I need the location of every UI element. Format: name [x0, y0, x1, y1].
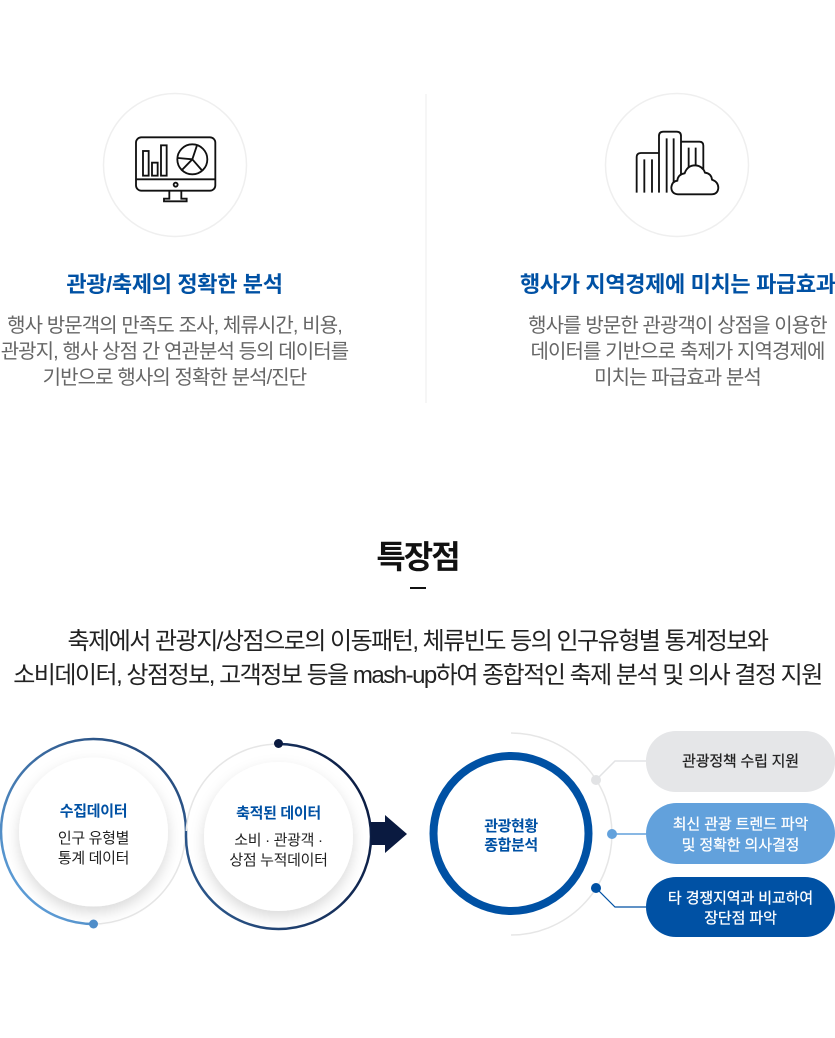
- pill: trend: 및 정확한 의사결정: [682, 837, 799, 854]
- pill: comparison: 장단점 파악: [704, 910, 777, 927]
- label: collected data: 인구 유형별: [58, 830, 129, 847]
- label: accumulated data: 상점 누적데이터: [229, 852, 328, 869]
- pill: comparison: 타 경쟁지역과 비교하여: [668, 890, 813, 907]
- pill: policy support: [646, 732, 835, 792]
- text block: regional economy: 행사를 방문한 관광객이 상점을 이용한: [528, 315, 827, 337]
- label: overall analysis: [484, 818, 538, 854]
- text block: tourism accuracy: [1, 315, 348, 389]
- text block: tourism accuracy: 관광지, 행사 상점 간 연관분석 등의 데이터를: [1, 341, 348, 363]
- heading: regional economy: 행사가 지역경제에 미치는 파급효과: [520, 272, 835, 297]
- description: 축제에서 관광지/상점으로의 이동패턴, 체류빈도 등의 인구유형별 통계정보와: [68, 628, 767, 655]
- icon: monitor with charts: [104, 94, 246, 236]
- text block: regional economy: 미치는 파급효과 분석: [594, 367, 761, 389]
- text block: tourism accuracy: 행사 방문객의 만족도 조사, 체류시간, 비용,: [7, 315, 342, 337]
- label: collected data: 통계 데이터: [58, 850, 129, 867]
- description: [13, 628, 822, 689]
- text block: tourism accuracy: 기반으로 행사의 정확한 분석/진단: [43, 367, 306, 389]
- label: collected data: [58, 803, 129, 867]
- label: accumulated data: 소비 · 관광객 ·: [234, 832, 323, 849]
- pill: trend: 최신 관광 트렌드 파악: [673, 816, 808, 833]
- arrow: [371, 815, 407, 853]
- label: overall analysis: 종합분석: [484, 837, 538, 854]
- title underline: [410, 587, 426, 589]
- diagram: collected data ring: [1, 739, 186, 928]
- diagram: analysis ring with connectors: [434, 733, 646, 935]
- label: accumulated data: [229, 805, 328, 869]
- label: collected data: 수집데이터: [60, 803, 127, 820]
- label: overall analysis: 관광현황: [484, 818, 538, 835]
- heading: tourism accuracy: 관광/축제의 정확한 분석: [66, 272, 283, 297]
- pill: trend: [646, 803, 835, 864]
- label: accumulated data: 축적된 데이터: [236, 805, 321, 822]
- text block: regional economy: 데이터를 기반으로 축제가 지역경제에: [530, 341, 824, 363]
- pill: policy support: 관광정책 수립 지원: [682, 753, 799, 770]
- title: 특장점: [376, 539, 459, 575]
- icon: buildings and cloud: [606, 94, 748, 236]
- description: 소비데이터, 상점정보, 고객정보 등을 mash-up하여 종합적인 축제 분석 및 의사 결정 지원: [13, 662, 822, 689]
- pill: comparison: [646, 877, 835, 937]
- diagram: accumulated data ring: [186, 739, 371, 929]
- text block: regional economy: [528, 315, 827, 389]
